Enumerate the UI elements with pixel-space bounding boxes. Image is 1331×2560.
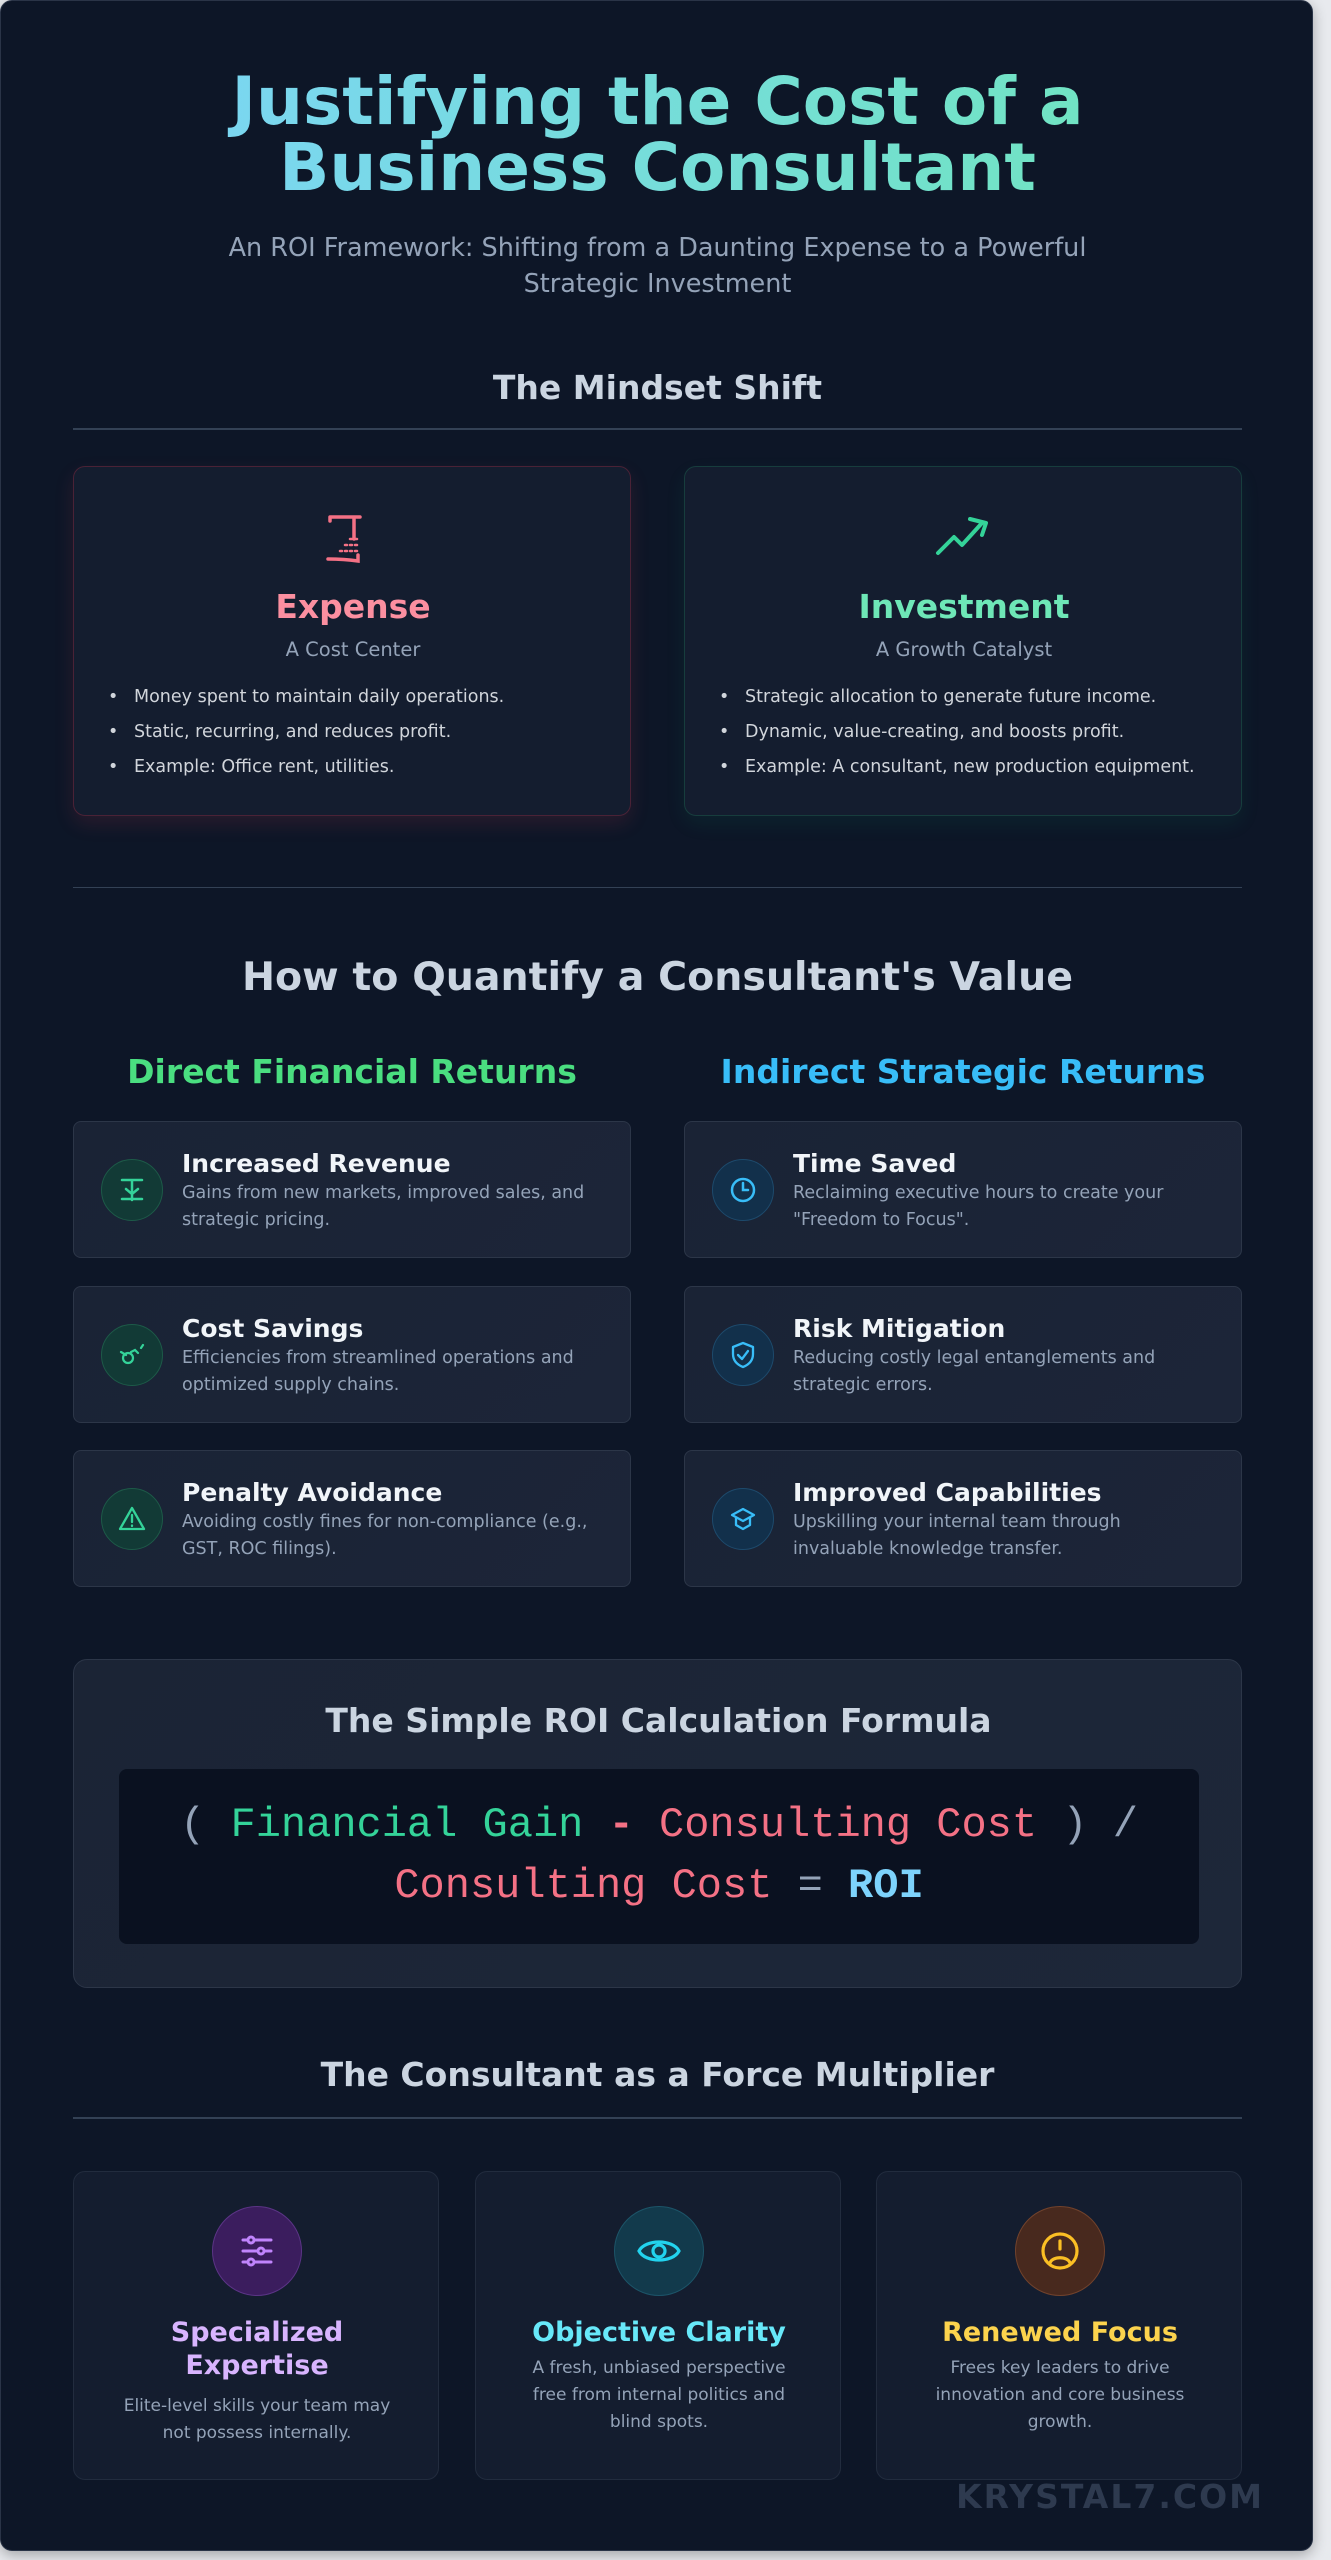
formula code box: Consulting Cost = ROI [394, 1862, 924, 1910]
item: penalty avoidance: Avoiding costly fines for non-compliance (e.g., GST, ROC filings). [182, 1512, 587, 1559]
item: risk mitigation: Risk Mitigation [793, 1314, 1005, 1343]
card: renewed focus: Frees key leaders to drive innovation and core business growth. [936, 2358, 1184, 2432]
title [1, 69, 1314, 201]
icon: expense [326, 515, 362, 563]
formula title: The Simple ROI Calculation Formula [325, 1701, 992, 1740]
card: specialized expertise: Specialized Expertise [171, 2317, 343, 2381]
expense bullets: Static, recurring, and reduces profit. [134, 722, 451, 742]
icon: trend up [936, 517, 988, 556]
expense subtitle: A Cost Center [286, 638, 420, 661]
card: specialized expertise [73, 2171, 439, 2480]
watermark: KRYSTAL7.COM [956, 2477, 1264, 2516]
heading: quantify: How to Quantify a Consultant's Value [242, 954, 1073, 1000]
investment bullets: Example: A consultant, new production equipment. [745, 757, 1195, 777]
investment title: Investment [858, 587, 1070, 626]
card: objective clarity: Objective Clarity [532, 2317, 786, 2348]
item: risk mitigation [684, 1286, 1242, 1423]
item: increased revenue [73, 1121, 631, 1258]
item: improved capabilities [684, 1450, 1242, 1587]
subtitle: An ROI Framework: Shifting from a Daunting Expense to a Powerful Strategic Investment [229, 233, 1086, 299]
investment bullets: Strategic allocation to generate future income. [745, 687, 1156, 707]
investment subtitle: A Growth Catalyst [876, 638, 1052, 661]
item: improved capabilities: Upskilling your internal team through invaluable knowledge transfer. [793, 1512, 1121, 1559]
item: cost savings: Cost Savings [182, 1314, 363, 1343]
panel: ROI formula [73, 1659, 1242, 1988]
item: cost savings [73, 1286, 631, 1423]
expense bullets: Example: Office rent, utilities. [134, 757, 394, 777]
heading: direct: Direct Financial Returns [127, 1052, 577, 1091]
item: time saved: Time Saved [793, 1149, 956, 1178]
item: increased revenue: Gains from new markets, improved sales, and strategic pricing. [182, 1183, 584, 1230]
panel: expense [73, 466, 631, 816]
item: time saved [684, 1121, 1242, 1258]
item: increased revenue: Increased Revenue [182, 1149, 451, 1178]
investment bullets [722, 687, 1195, 777]
panel: investment [684, 466, 1242, 816]
card: renewed focus: Renewed Focus [942, 2317, 1178, 2348]
heading: mindset shift: The Mindset Shift [493, 368, 822, 407]
item: cost savings: Efficiencies from streamlined operations and optimized supply chains. [182, 1348, 574, 1395]
card: renewed focus [876, 2171, 1242, 2480]
heading: indirect: Indirect Strategic Returns [721, 1052, 1205, 1091]
expense title: Expense [275, 587, 431, 626]
heading: force multiplier: The Consultant as a Force Multiplier [321, 2055, 994, 2094]
card: objective clarity: A fresh, unbiased perspective free from internal politics and blind spots. [532, 2358, 786, 2432]
title: Business Consultant [279, 129, 1036, 206]
title: Justifying the Cost of a [231, 63, 1084, 140]
card: specialized expertise: Elite-level skills your team may not possess internally. [124, 2396, 390, 2443]
expense bullets: Money spent to maintain daily operations. [134, 687, 504, 707]
card: objective clarity [475, 2171, 841, 2480]
formula code box [119, 1769, 1199, 1944]
item: penalty avoidance: Penalty Avoidance [182, 1478, 442, 1507]
item: penalty avoidance [73, 1450, 631, 1587]
item: time saved: Reclaiming executive hours to create your "Freedom to Focus". [793, 1183, 1163, 1230]
expense bullets [110, 687, 504, 777]
formula code box: ( Financial Gain - Consulting Cost ) / [180, 1801, 1138, 1849]
investment bullets: Dynamic, value-creating, and boosts profit. [745, 722, 1124, 742]
item: improved capabilities: Improved Capabilities [793, 1478, 1102, 1507]
item: risk mitigation: Reducing costly legal entanglements and strategic errors. [793, 1348, 1155, 1395]
